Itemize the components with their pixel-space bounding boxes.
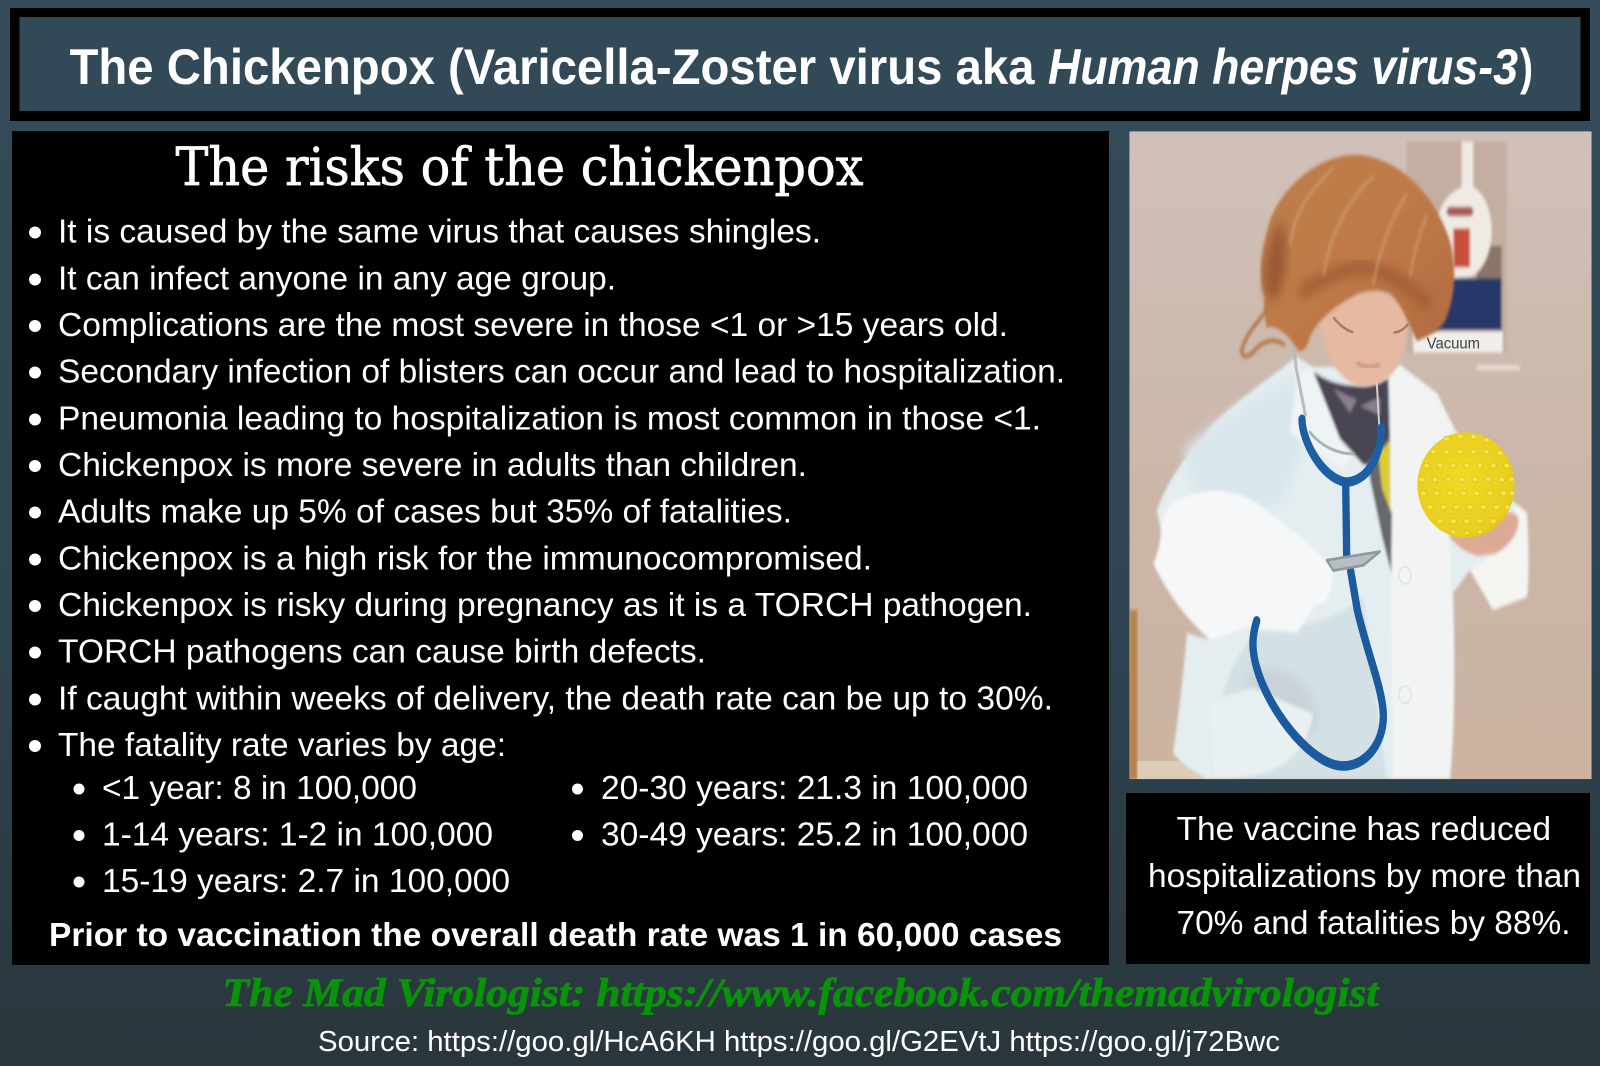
sleeve bbox=[1153, 491, 1333, 640]
risk bullet list: Chickenpox is risky during pregnancy as it is a TORCH pathogen. bbox=[58, 586, 1032, 623]
risk bullet list: The fatality rate varies by age: bbox=[58, 726, 506, 763]
death rate statement: Prior to vaccination the overall death rate was 1 in 60,000 cases bbox=[49, 916, 1062, 953]
title banner bbox=[10, 8, 1590, 121]
coat buttons bbox=[1399, 567, 1411, 703]
risk bullet list: Chickenpox is a high risk for the immunocompromised. bbox=[58, 540, 872, 576]
fatality rates by age bbox=[74, 769, 1028, 899]
photo: toddler in doctor's coat with stethoscope and spiky ball bbox=[1129, 131, 1592, 779]
panel: vaccine impact callout: hospitalizations by more than bbox=[1148, 857, 1581, 894]
title banner: The Chickenpox (Varicella-Zoster virus aka bbox=[70, 39, 1036, 95]
coat bbox=[1153, 356, 1529, 779]
risk bullet list: TORCH pathogens can cause birth defects. bbox=[58, 632, 706, 670]
risk bullet list: It can infect anyone in any age group. bbox=[58, 260, 616, 296]
title banner: ) bbox=[1520, 39, 1533, 95]
credit line: The Mad Virologist: https://www.facebook.com/themadvirologist bbox=[222, 970, 1381, 1015]
source line: Source: https://goo.gl/HcA6KH https://goo.gl/G2EVtJ https://goo.gl/j72Bwc bbox=[318, 1026, 1280, 1058]
stethoscope bbox=[1253, 337, 1383, 766]
right lapel and placket bbox=[1390, 365, 1455, 510]
fatality rates by age: 15-19 years: 2.7 in 100,000 bbox=[102, 862, 510, 899]
panel heading: The risks of the chickenpox bbox=[176, 138, 864, 198]
title banner: Human herpes virus-3 bbox=[1048, 39, 1518, 95]
risk bullet list: Chickenpox is more severe in adults than children. bbox=[58, 446, 807, 483]
wall poster bbox=[1407, 142, 1520, 370]
fatality rates by age: 20-30 years: 21.3 in 100,000 bbox=[601, 769, 1028, 806]
risk bullet list: Secondary infection of blisters can occur and lead to hospitalization. bbox=[58, 352, 1065, 390]
risk bullet list: It is caused by the same virus that causes shingles. bbox=[58, 212, 821, 250]
risk bullet list: If caught within weeks of delivery, the death rate can be up to 30%. bbox=[58, 680, 1053, 716]
panel: risks of chickenpox bbox=[12, 131, 1109, 965]
panel: vaccine impact callout: The vaccine has reduced bbox=[1176, 810, 1551, 847]
hand bbox=[1448, 513, 1518, 556]
spiky yellow ball bbox=[1417, 432, 1515, 538]
risk bullet list bbox=[29, 212, 1065, 763]
risk bullet list: Pneumonia leading to hospitalization is most common in those <1. bbox=[58, 400, 1041, 436]
panel: vaccine impact callout bbox=[1126, 793, 1590, 964]
risk bullet list: Complications are the most severe in those <1 or >15 years old. bbox=[58, 306, 1008, 343]
hair and face bbox=[1242, 155, 1454, 387]
lower chest shade bbox=[1212, 597, 1387, 779]
shirt bbox=[1313, 372, 1390, 465]
fatality rates by age: <1 year: 8 in 100,000 bbox=[102, 769, 417, 806]
panel: vaccine impact callout: 70% and fatalities by 88%. bbox=[1176, 904, 1570, 941]
fatality rates by age: 30-49 years: 25.2 in 100,000 bbox=[601, 816, 1028, 852]
risk bullet list: Adults make up 5% of cases but 35% of fatalities. bbox=[58, 492, 792, 530]
fatality rates by age: 1-14 years: 1-2 in 100,000 bbox=[102, 816, 493, 852]
photo: toddler in doctor's coat with stethoscope and spiky ball: Vacuum bbox=[1427, 334, 1480, 352]
